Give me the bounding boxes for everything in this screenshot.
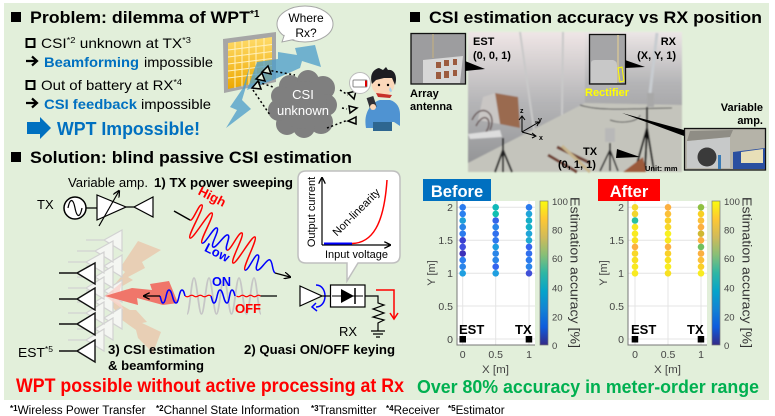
speech bubble: where Rx: Where [288,11,324,25]
chart: ON/OFF wave: ON [212,274,231,289]
photo: measurement setup [468,32,682,172]
text block: out of battery: impossible [141,96,211,112]
chart: after scatter: 60 [724,254,735,265]
callout: non-linearity graph: Non-linearity [331,186,383,239]
footnotes: *3 [311,404,319,413]
chart: before scatter: 80 [552,226,563,236]
chart: after scatter: 1 [618,268,624,280]
label: array antenna: Array [410,88,440,100]
chart: before scatter: 0.5 [438,301,453,313]
icon: worried person [365,67,400,131]
chart: before scatter: 2 [447,202,453,214]
pointer: variable amp [622,113,684,136]
chart: after scatter: 0.5 [609,301,624,313]
chart: after scatter: 100 [724,197,740,208]
chart: after scatter: 40 [724,284,735,294]
chart: before scatter: 0 [552,341,557,352]
chart: before scatter: 100 [552,197,568,208]
chart: after scatter: 1.5 [609,235,624,247]
footnotes: *1 [10,404,18,413]
label: TX position: TX [583,146,598,158]
label: RX position: (X, Y, 1) [637,50,676,62]
chart: power-swept wave: High [196,183,229,210]
axes in photo: y [538,117,542,124]
label: array antenna: antenna [410,101,453,113]
axes in photo: z [520,108,524,115]
inset: array antenna [411,34,466,84]
text block: CSI unknown [26,35,213,70]
chart: before scatter: X [m] [482,364,509,376]
text block: out of battery: *4 [173,77,182,87]
chart: before scatter: 40 [552,284,563,294]
chart: after scatter: 0 [724,341,729,352]
label: EST: EST [18,345,43,360]
callout: non-linearity graph: Input voltage [325,249,388,261]
text block: out of battery [26,77,211,112]
chart: after scatter: 80 [724,226,735,236]
label: CSI estimation: 3) CSI estimation [108,342,215,357]
icon: RX rectifier circuit: RX [339,324,357,339]
label: unit: Unit: mm [645,164,678,173]
footnotes: *5 [448,404,456,413]
callout: WPT impossible: WPT Impossible! [57,119,200,139]
text block: CSI unknown: *2 [67,35,76,45]
label: CSI estimation: & beamforming [108,358,204,373]
chart: before scatter: 1.5 [438,235,453,247]
text block: CSI unknown: unknown at TX [76,35,183,51]
inset: variable amp [684,128,766,170]
text block: CSI unknown: CSI [41,35,64,51]
label: TX position: (0, 1, 1) [558,159,596,171]
footnotes: *2 [156,404,164,413]
chart: ON/OFF wave: OFF [235,301,261,316]
icon: beams [226,45,321,128]
icon: CSI unknown cloud [268,70,337,138]
callout: non-linearity graph [298,171,400,281]
callout: non-linearity graph: Output current [306,177,318,247]
chart: after scatter: 0 [632,349,638,361]
chart: after scatter: 2 [618,202,624,214]
chart: power-swept wave [174,183,290,277]
chart: before scatter: Y [m] [426,260,438,286]
chart: before scatter: TX [515,322,532,337]
label: RX position: RX [661,36,677,48]
text block: CSI unknown: Beamforming [44,54,139,70]
heading: problem: *1 [250,9,260,20]
heading: accuracy: CSI estimation accuracy vs RX position [429,8,762,27]
chart: after scatter: TX [687,322,704,337]
chart: after scatter: 0.5 [661,349,675,361]
label: rectifier: Rectifier [585,87,630,99]
icon: RX rectifier circuit [300,285,398,339]
chart: before scatter: Estimation accuracy [%] [568,197,582,348]
text block: out of battery: Out of battery at RX [41,77,165,93]
chart: after scatter: EST [631,322,656,337]
badge: before [423,179,491,201]
axes in photo [519,108,543,142]
label: RX position [637,36,677,62]
label: variable amp: Variable [721,102,763,114]
conclusion: WPT possible: WPT possible without active processing at Rx [16,376,404,397]
icon: CSI unknown cloud: unknown [277,103,329,118]
heading: solution: Solution: blind passive CSI estimation [30,148,352,167]
chart: before scatter: 1 [526,349,532,361]
label: variable amp [721,102,763,127]
icon: small antennas [252,66,357,124]
dotted paths [253,70,348,128]
label: variable amp: amp. [737,115,763,127]
label: TX power sweeping: 1) TX power sweeping [154,175,293,190]
TX chain: Variable amp. [68,175,148,190]
badge: after [598,179,660,201]
label: EST position: (0, 0, 1) [473,50,511,62]
panel: problem [11,6,400,139]
chart: after scatter: Estimation accuracy [%] [740,197,754,348]
text block: CSI unknown: *3 [182,35,191,45]
conclusion: over 80% accuracy: Over 80% accuracy in meter-order range [417,377,759,397]
axes in photo: x [539,135,543,142]
chart: after scatter: 0 [618,334,624,346]
badge: before: Before [431,183,483,201]
chart: before scatter: 0.5 [488,349,503,361]
chart: before scatter: 1 [447,268,453,280]
badge: after: After [610,183,649,201]
label: quasi ON/OFF keying: 2) Quasi ON/OFF keying [244,342,395,357]
chart: after scatter [598,197,754,376]
chart: before scatter: 20 [552,312,563,324]
chart: power-swept wave: Low [202,240,233,266]
footnotes: *4 [386,404,394,413]
chart: before scatter: 0 [460,349,466,361]
chart: before scatter: 60 [552,254,563,265]
pointer: RX [625,60,645,68]
chart: before scatter [426,197,582,376]
chart: ON/OFF wave [144,274,277,316]
label: EST position: EST [473,36,495,48]
text block: out of battery: CSI feedback [44,96,137,112]
text block: CSI unknown: impossible [144,54,213,70]
pointer: TX [616,149,640,158]
footnotes [10,404,505,416]
heading: problem: Problem: dilemma of WPT [30,8,251,27]
speech bubble: where Rx: Rx? [295,26,317,40]
chart: after scatter: Y [m] [598,260,610,286]
chart: before scatter: 0 [447,334,453,346]
label: EST: *5 [45,345,54,354]
icon: low battery bubble [350,72,370,94]
speech bubble: where Rx [277,6,333,42]
icon: antenna panel [223,32,276,93]
chart: after scatter: 1 [698,349,704,361]
TX chain [37,175,153,226]
chart: after scatter: 20 [724,312,735,324]
chart: before scatter: EST [459,322,484,337]
icon: red reflected beam [105,281,178,310]
icon: CSI unknown cloud: CSI [292,87,314,102]
panel: solution [11,148,400,373]
TX chain: TX [37,197,54,212]
inset: rectifier [590,34,626,84]
icon: EST antenna array [59,230,161,362]
chart: after scatter: X [m] [654,364,681,376]
pointer: array antenna [465,61,485,71]
